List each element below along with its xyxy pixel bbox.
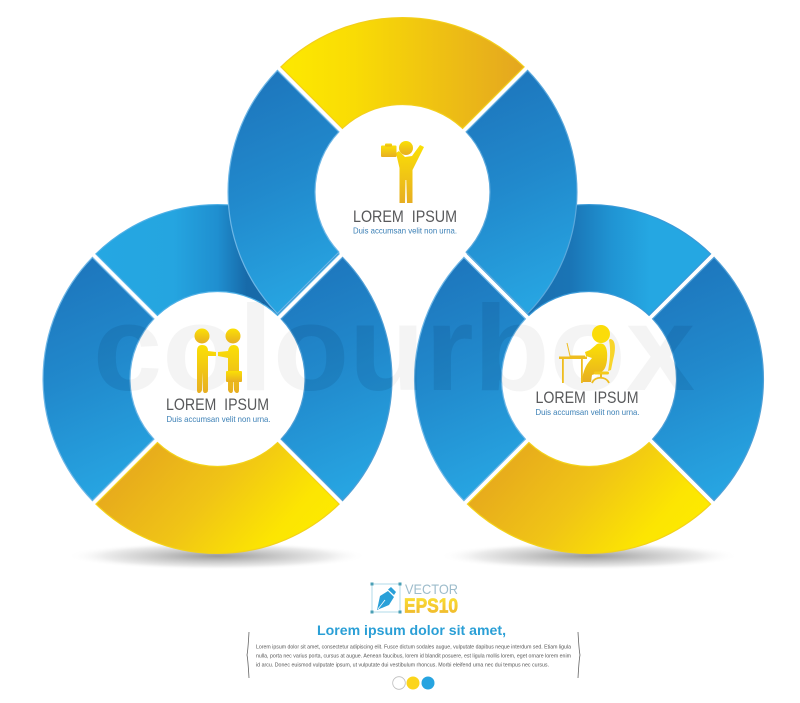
text: left ring title: LOREM IPSUM xyxy=(166,395,269,414)
paragraph xyxy=(256,644,572,668)
icon: person working at a desk xyxy=(559,325,615,383)
left ring right segment xyxy=(281,257,392,501)
paragraph: Lorem ipsum dolor sit amet, consectetur adipiscing elit. Fusce dictum sodales augue, vulputate dapibus neque interdum sed. Etiam ligula xyxy=(256,644,572,650)
left ring bottom yellow segment xyxy=(96,443,339,553)
icon: two people shaking hands xyxy=(194,328,242,393)
shadow: left ring xyxy=(67,542,367,570)
text: top ring title: LOREM IPSUM xyxy=(353,207,457,226)
ring: top xyxy=(228,18,577,314)
watermark: colourbox xyxy=(93,280,695,416)
icon: person with raised arm and briefcase xyxy=(381,141,424,203)
logo: vector eps10 xyxy=(370,581,458,618)
paragraph: nulla, porta nec varius porta, cursus at augue. Aenean faucibus, lorem id blandit posuere, est ligula mollis lorem, eget ornare lorem enim xyxy=(256,654,571,660)
ring: right xyxy=(415,205,763,553)
text: EPS10: EPS10 xyxy=(404,596,458,618)
text: right ring title: LOREM IPSUM xyxy=(536,388,638,407)
dots: colour key xyxy=(393,676,434,690)
right ring left segment xyxy=(415,257,525,501)
heading: lorem ipsum: Lorem ipsum dolor sit amet, xyxy=(317,623,506,638)
paragraph: id arcu. Donec euismod vulputate ipsum, ut vulputate dui vestibulum rhoncus. Morbi eleifend urna nec dui tempus nec cursus. xyxy=(256,662,549,668)
text: top ring subtitle: Duis accumsan velit non urna. xyxy=(353,226,457,236)
ring: left xyxy=(43,205,392,553)
left brace xyxy=(247,632,249,678)
text: VECTOR: VECTOR xyxy=(405,581,458,597)
top ring yellow segment xyxy=(281,18,524,128)
top ring right segment xyxy=(466,70,577,314)
icon: pen nib in frame xyxy=(370,582,402,614)
text: left ring subtitle: Duis accumsan velit non urna. xyxy=(166,414,270,424)
shadow: right ring xyxy=(439,542,739,570)
text: right ring subtitle: Duis accumsan velit non urna. xyxy=(536,407,640,417)
top ring left segment xyxy=(228,70,339,314)
right brace xyxy=(578,632,580,678)
right ring top segment xyxy=(467,205,711,315)
right ring right segment xyxy=(653,257,763,501)
right ring bottom yellow segment xyxy=(467,443,711,553)
left ring left segment xyxy=(43,257,154,501)
left ring top segment xyxy=(96,205,339,315)
watermark tint over rings: colourbox xyxy=(93,280,695,416)
